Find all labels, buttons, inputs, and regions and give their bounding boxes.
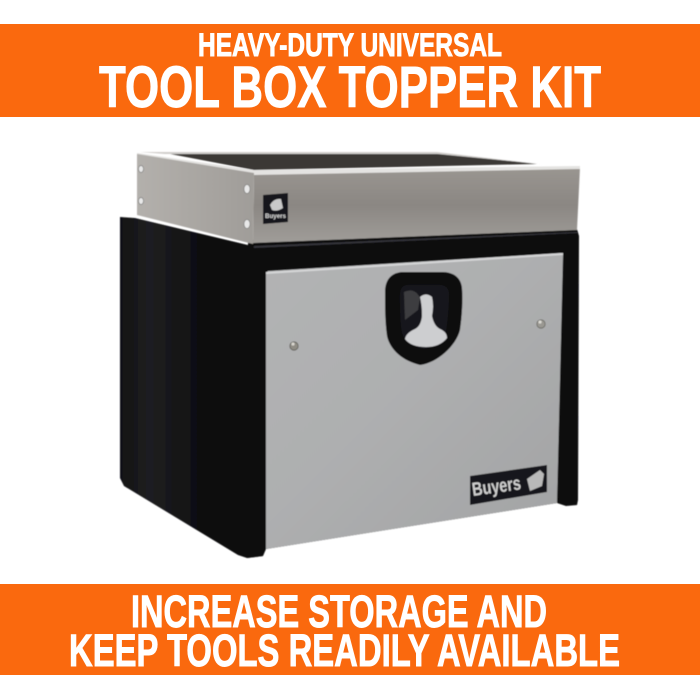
bottom banner (0, 584, 700, 676)
tagline line 1: INCREASE STORAGE AND (131, 586, 547, 637)
topper rivets (138, 166, 250, 228)
black box side panel (120, 217, 263, 558)
topper interior (165, 153, 537, 170)
product: tool box with topper (120, 152, 580, 558)
subtitle: HEAVY-DUTY UNIVERSAL (198, 27, 502, 63)
door logo plate: Buyers (471, 473, 522, 501)
top banner (0, 24, 700, 120)
door right rivet (537, 320, 545, 328)
door logo plate (470, 465, 547, 505)
topper front panel (253, 167, 580, 243)
topper top rim (137, 153, 580, 175)
door latch (385, 272, 462, 365)
topper logo badge (263, 193, 288, 224)
topper back rim (140, 152, 540, 164)
door left rivet (290, 342, 298, 350)
topper side panel (137, 154, 254, 244)
door panel (266, 253, 563, 549)
frame highlight (254, 232, 577, 248)
door top highlight (266, 253, 563, 274)
topper logo badge: Buyers (265, 214, 287, 220)
black box front frame (247, 229, 579, 558)
